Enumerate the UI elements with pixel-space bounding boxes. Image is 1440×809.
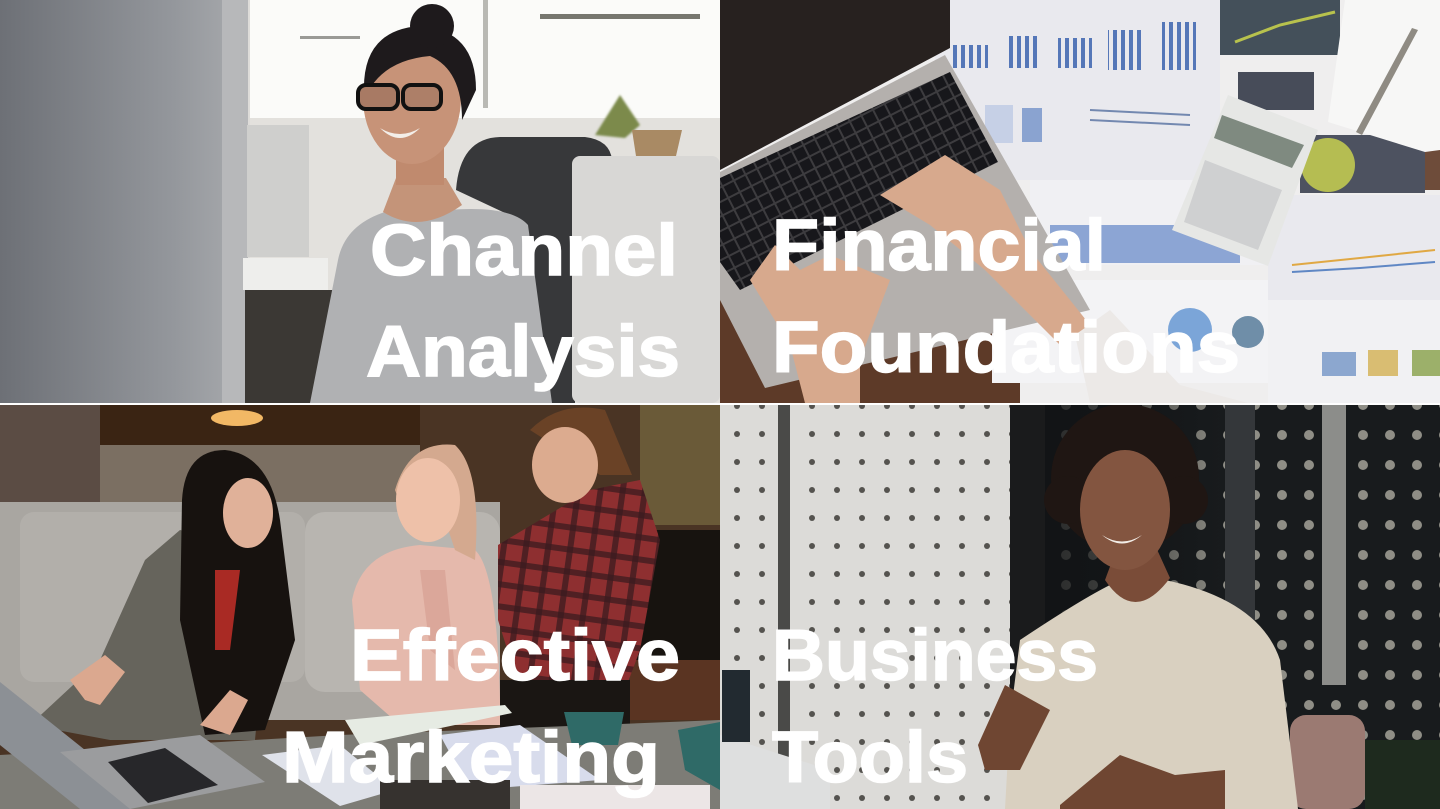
panel: business tools photo xyxy=(720,404,1440,809)
panel: financial foundations photo xyxy=(720,0,1440,403)
heading: Effective Marketing: Marketing xyxy=(282,718,660,798)
heading: Business Tools: Tools xyxy=(772,718,968,798)
heading: Business Tools xyxy=(772,616,1098,798)
chair xyxy=(456,137,612,403)
woman left xyxy=(30,450,295,740)
heading: Channel Analysis xyxy=(366,211,680,392)
monitor xyxy=(572,156,720,403)
notebook and pen xyxy=(1328,0,1440,152)
woman centre xyxy=(352,445,505,725)
heading: Financial Foundations: Foundations xyxy=(772,308,1240,388)
heading: Effective Marketing xyxy=(282,616,680,798)
heading: Channel Analysis: Channel xyxy=(370,211,678,291)
laptop xyxy=(720,0,1090,388)
panel: effective marketing photo xyxy=(0,405,720,809)
calculator xyxy=(1172,95,1318,266)
woman right xyxy=(498,408,660,690)
coffee cups xyxy=(564,712,720,790)
woman xyxy=(978,404,1298,809)
charts on paper xyxy=(935,0,1440,403)
table xyxy=(0,720,720,809)
panel: channel analysis photo xyxy=(0,0,720,403)
woman xyxy=(310,4,552,403)
laptop xyxy=(0,682,265,809)
heading: Business Tools: Business xyxy=(772,616,1098,696)
sofa xyxy=(0,502,500,720)
heading: Financial Foundations xyxy=(772,206,1240,388)
heading: Channel Analysis: Analysis xyxy=(366,312,680,392)
hands xyxy=(750,155,1090,403)
heading: Effective Marketing: Effective xyxy=(350,616,680,696)
heading: Financial Foundations: Financial xyxy=(772,206,1106,286)
